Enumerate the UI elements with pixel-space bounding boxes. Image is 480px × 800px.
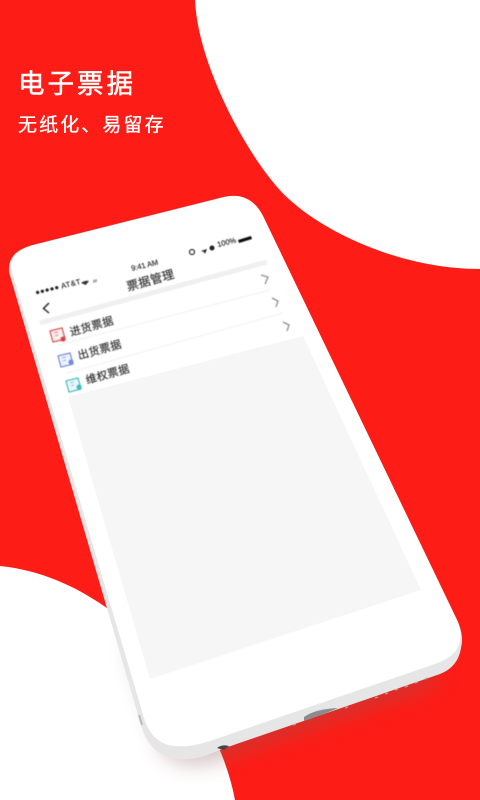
status bar xyxy=(34,236,252,297)
battery text: 100% xyxy=(216,236,237,249)
wifi icon xyxy=(81,281,89,285)
side button xyxy=(139,715,142,725)
page title: 票据管理 xyxy=(125,266,176,294)
carrier: ●●●●● AT&T xyxy=(34,277,82,297)
label: 维权票据 xyxy=(84,361,131,387)
list dividers xyxy=(58,290,283,373)
label: 出货票据 xyxy=(76,337,123,362)
phone screen content xyxy=(34,236,289,392)
phone xyxy=(9,196,462,759)
grey content area xyxy=(68,336,421,679)
subtitle: 无纸化、易留存 xyxy=(18,114,166,136)
phone side body xyxy=(9,196,462,759)
phone shadow xyxy=(125,640,441,765)
connector port xyxy=(304,708,338,721)
white arc bottom left xyxy=(0,566,235,800)
clock: 9:41 AM xyxy=(130,258,159,273)
row: rights receipts xyxy=(66,361,131,392)
nav bar bottom divider xyxy=(40,262,267,323)
icon: teal receipt xyxy=(66,378,82,392)
icon: red receipt xyxy=(50,328,66,342)
location arrow xyxy=(201,249,207,254)
icon: blue receipt xyxy=(58,353,74,367)
back arrow xyxy=(44,303,49,313)
status icon: eye xyxy=(190,250,194,254)
row arrows xyxy=(261,275,289,331)
row: incoming receipts xyxy=(50,313,115,342)
alarm icon xyxy=(210,246,214,250)
bottom speaker holes xyxy=(293,678,428,725)
headphone jack xyxy=(217,745,229,750)
bluetooth-like status xyxy=(93,279,97,283)
row: outgoing receipts xyxy=(58,337,123,367)
phone front face xyxy=(11,196,461,746)
battery xyxy=(238,236,252,243)
title: 电子票据 xyxy=(18,69,136,99)
white arc top right xyxy=(195,0,480,269)
label: 进货票据 xyxy=(68,313,115,339)
